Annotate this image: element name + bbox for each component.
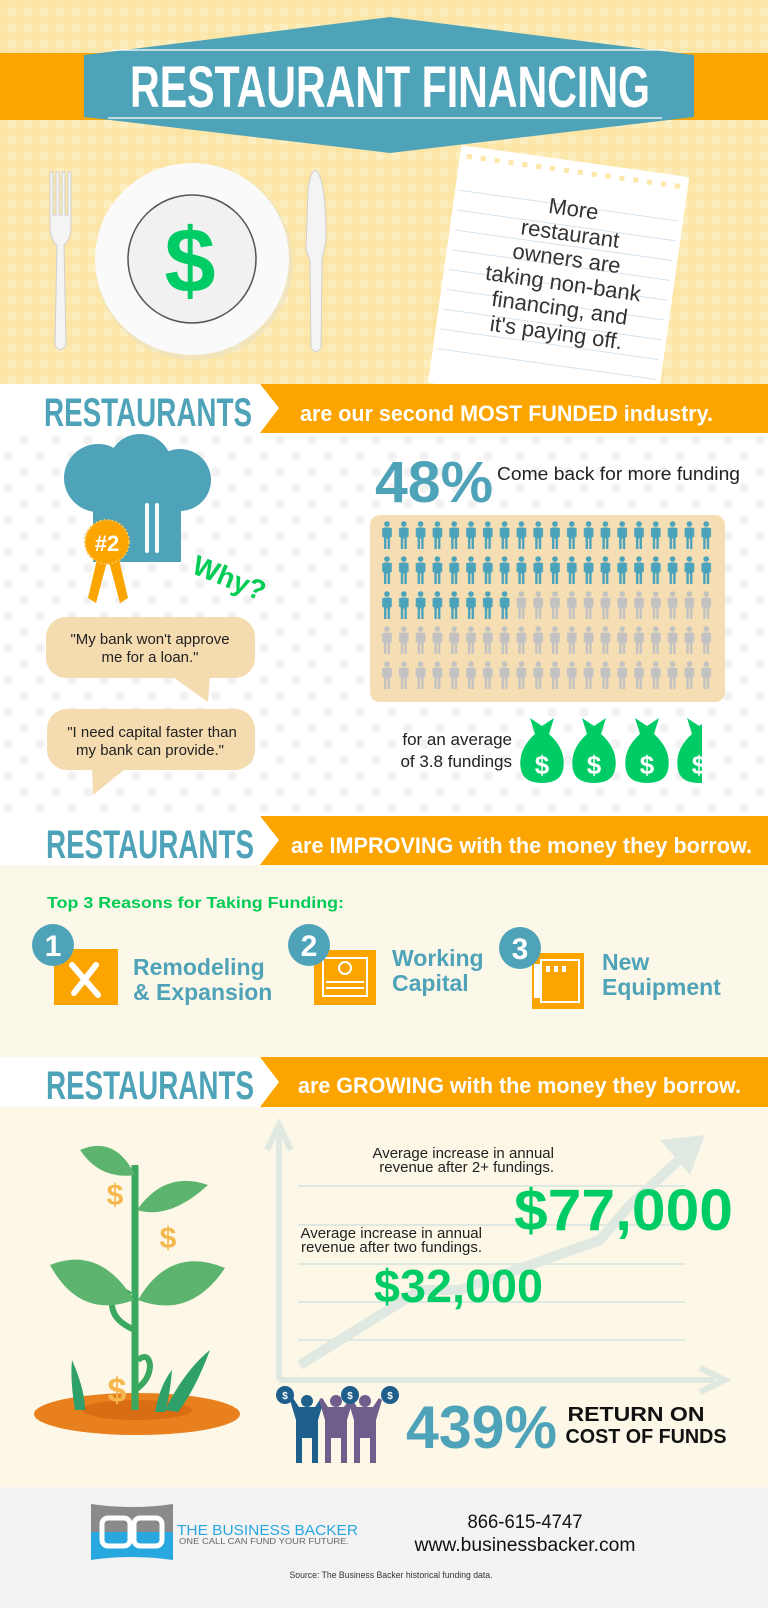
stat: 32000 [300,1225,543,1312]
stat: 439%: RETURN ON [568,1404,704,1426]
icon: knife [306,170,326,352]
stat: 439%: COST OF FUNDS [566,1426,726,1448]
title banner [84,17,694,153]
stat 48%: 48% [375,450,493,515]
section band 2 [0,816,768,867]
speech bubble 1: me for a loan." [101,649,199,666]
reason 2: Capital [392,970,469,996]
reason 3: Equipment [602,974,721,1000]
note text: taking non-bank [484,260,643,306]
note text: financing, and [490,286,629,330]
reason 2 [288,924,484,1005]
note text [477,186,654,356]
icon: plate with dollar: $ [164,210,216,312]
reason 1 [32,924,272,1005]
icon: #2 ribbon: #2 [95,531,119,556]
stat: 32000: revenue after two fundings. [301,1239,482,1256]
icon: people with bags: $ [347,1391,353,1402]
stat: 32000: $32,000 [374,1260,543,1312]
average fundings text: for an average [402,730,512,749]
section 2 body [0,865,768,1057]
stat: 32000: Average increase in annual [300,1225,482,1242]
speech bubble 2: my bank can provide." [76,742,224,759]
icon: people with bags [276,1386,399,1463]
section band 3: RESTAURANTS [46,1064,254,1108]
reason 2: Working [392,945,484,971]
reason 3 [499,927,721,1009]
header background [0,0,768,384]
section band 1: RESTAURANTS [44,391,252,435]
icon: chef hat [64,434,211,562]
section 3 body [0,1107,768,1487]
stat: 439% [406,1394,726,1461]
stat: 77000: revenue after 2+ fundings. [379,1159,554,1176]
orange ribbon band [0,53,768,120]
stat: 77000: $77,000 [514,1178,733,1243]
why text: Why? [188,549,270,607]
note text: restaurant [519,214,621,253]
section band 1: are our second MOST FUNDED industry. [300,401,713,426]
note text: More [547,193,600,225]
contact [413,1512,636,1556]
reason 1: Remodeling [133,954,265,980]
note text: owners are [511,238,622,278]
average fundings text [400,730,512,771]
section 1 body [0,433,768,816]
stat 48% [375,450,740,515]
footer [0,1487,768,1608]
speech bubble 2 [47,709,255,795]
section band 2: RESTAURANTS [46,823,254,867]
reason 3: New [602,949,649,975]
chart axes and growth arrow [267,1125,725,1392]
icon: money bags: $ [587,750,602,780]
reasons heading: Top 3 Reasons for Taking Funding: [47,895,344,912]
contact: 866-615-4747 [468,1512,582,1533]
source: Source: The Business Backer historical funding data. [290,1570,492,1580]
icon: money bags: $ [535,750,550,780]
icon: fork [50,172,71,350]
stat: 77000: Average increase in annual [372,1145,554,1162]
icon: #2 ribbon [85,520,129,603]
icon: plate with dollar [95,163,293,360]
reason 1: & Expansion [133,979,272,1005]
section band 3 [0,1057,768,1108]
section band 2: are IMPROVING with the money they borrow. [291,833,752,858]
icon: plant: $ [108,1372,127,1410]
icon: people with bags: $ [282,1391,288,1402]
speech bubble 2: "I need capital faster than [67,724,237,741]
icon: money bags [520,718,721,783]
contact: www.businessbacker.com [413,1535,636,1556]
speech bubble 1: "My bank won't approve [70,631,230,648]
icon: plant: $ [107,1179,124,1212]
reason 2: 2 [301,930,317,963]
stat: 77000 [372,1145,733,1243]
section band 1 [0,384,768,435]
people chart [370,515,725,702]
note text: it's paying off. [488,311,624,354]
average fundings text: of 3.8 fundings [400,752,512,771]
note paper [428,145,689,415]
icon: people with bags: $ [387,1391,393,1402]
reason 3: 3 [512,933,528,966]
stat: 439%: 439% [406,1394,557,1461]
section band 3: are GROWING with the money they borrow. [298,1073,741,1098]
logo: THE BUSINESS BACKER [177,1522,358,1539]
logo: ONE CALL CAN FUND YOUR FUTURE. [179,1537,349,1546]
icon: money bags: $ [640,750,655,780]
reason 1: 1 [45,930,61,963]
speech bubble 1 [46,617,255,702]
logo [91,1504,358,1560]
icon: plant [34,1146,240,1435]
stat 48%: Come back for more funding [497,464,740,484]
icon: money bags: $ [692,750,707,780]
icon: plant: $ [160,1222,177,1255]
